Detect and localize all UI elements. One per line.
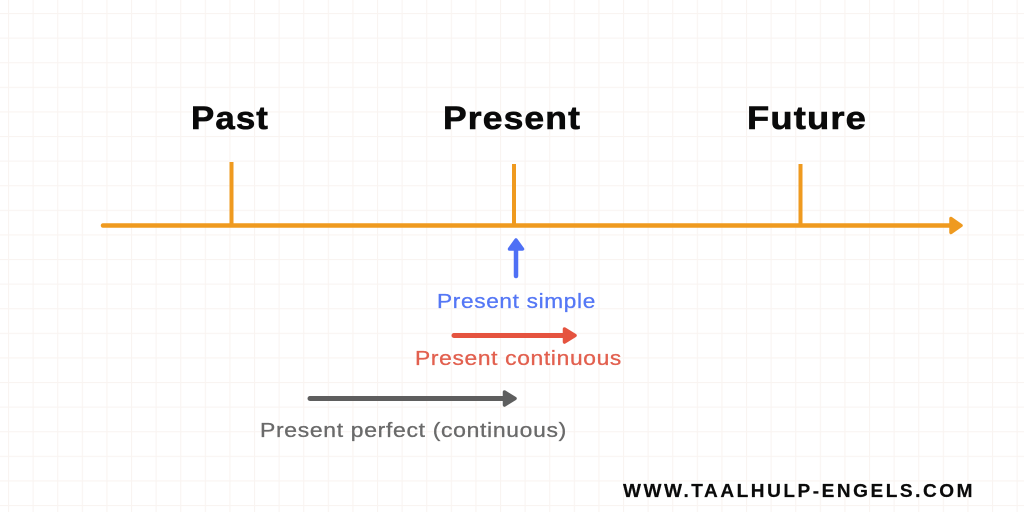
red right arrow [454,329,575,342]
orange timeline arrow with tick marks [103,162,961,232]
blue up arrow [510,240,522,276]
label: Present perfect (continuous): Present perfect (continuous) [260,420,567,442]
heading: Past: Past [191,100,269,136]
grey right arrow [310,392,515,405]
website url: WWW.TAALHULP-ENGELS.COM [623,481,975,501]
heading: Future: Future [747,100,867,136]
label: Present continuous: Present continuous [415,348,622,370]
heading: Present: Present [443,100,581,136]
label: Present simple: Present simple [437,291,596,313]
